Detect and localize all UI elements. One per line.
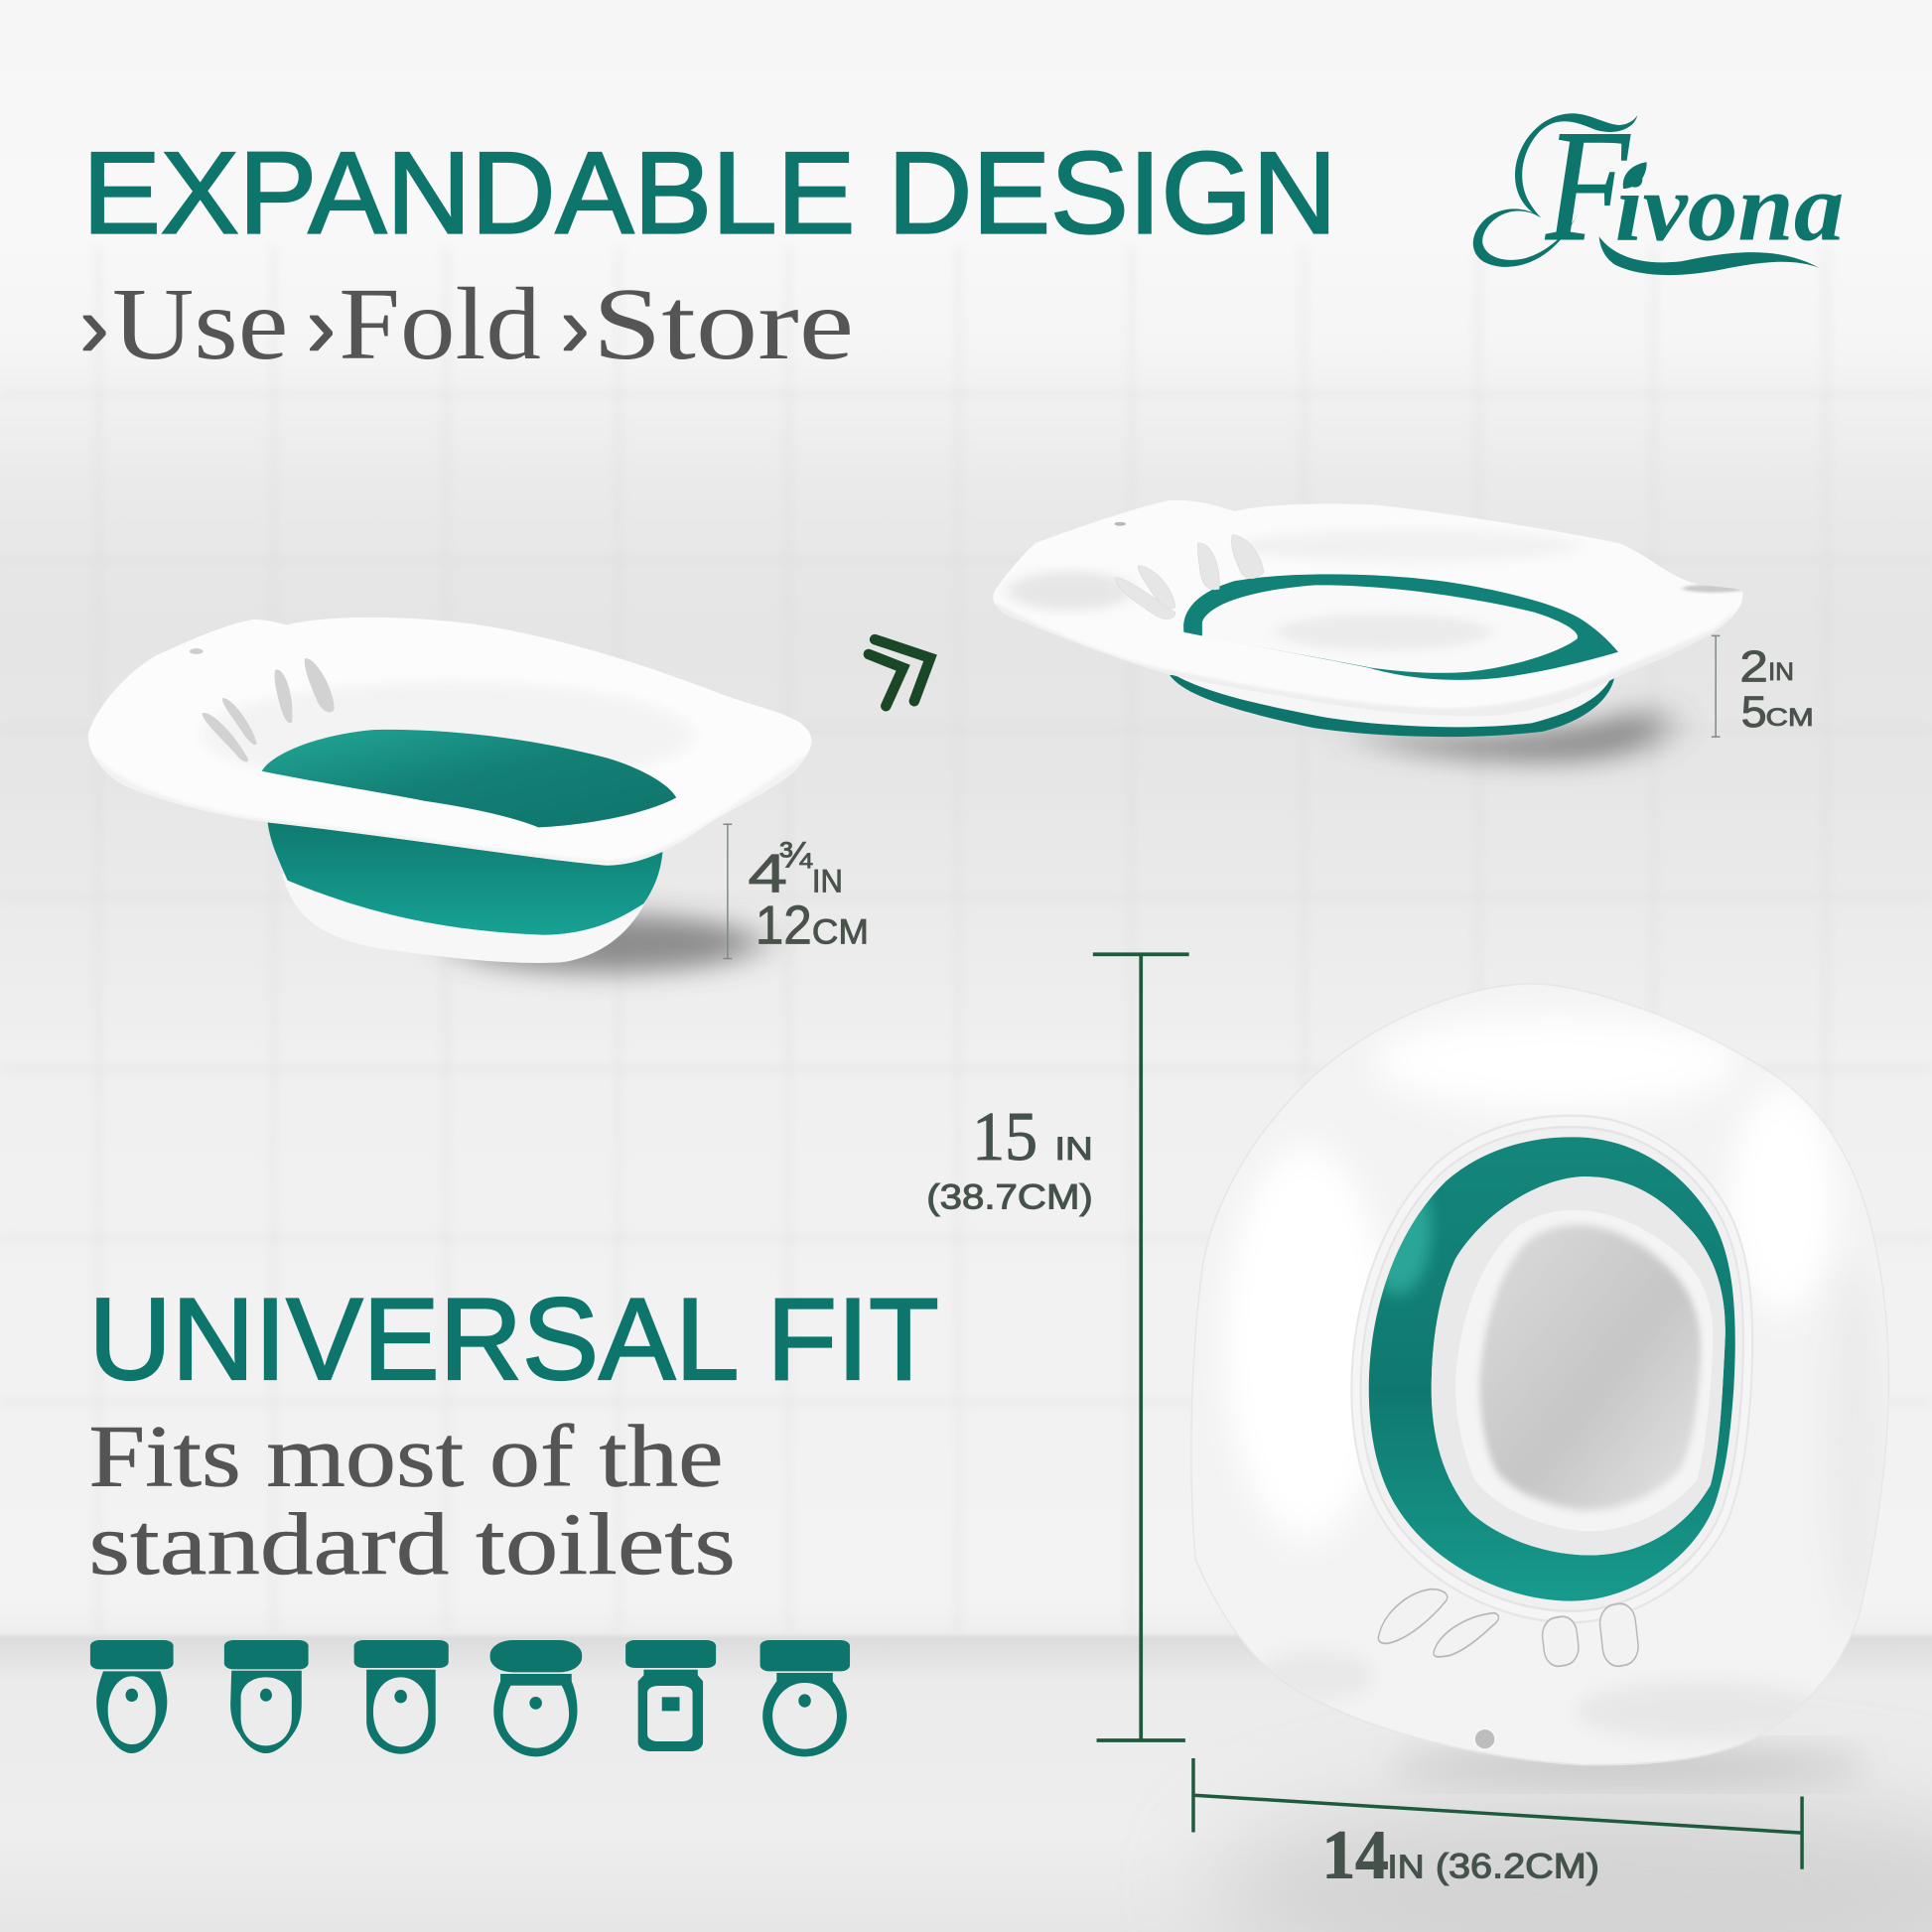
shadow under folded basin [1343, 705, 1665, 761]
height label folded: 5 [1741, 688, 1767, 737]
label: 14 in: IN [1387, 1849, 1425, 1885]
inner basin well [1479, 1225, 1701, 1510]
height label inches: 12 [756, 896, 812, 956]
rim hole [1474, 1728, 1495, 1750]
logo: Fivona: ivona [1615, 155, 1844, 262]
icon: elongated toilet [90, 1640, 174, 1753]
icon: round-tank toilet [490, 1640, 582, 1756]
drainage slots [203, 658, 335, 762]
height label folded [1739, 642, 1814, 737]
teal folded ring [1183, 574, 1618, 680]
icon: round toilet [760, 1640, 850, 1756]
icon: long square-back toilet [354, 1640, 449, 1754]
label: 14 in [1322, 1817, 1599, 1893]
folded basin interior [1202, 585, 1578, 673]
subtitle: use fold store: › [80, 279, 109, 375]
logo: Fivona: F [1545, 97, 1631, 274]
logo: Fivona [1473, 97, 1844, 275]
product: basin top view [1191, 984, 1888, 1778]
subtitle: use fold store: Store [593, 266, 854, 381]
icons: toilet shapes [90, 1640, 850, 1756]
ridges around teal ring [1369, 1137, 1735, 1601]
subtitle: use fold store: Fold [339, 266, 541, 381]
height label inches: CM [812, 914, 869, 952]
basin rim [993, 500, 1742, 716]
inner basin ridge [1455, 1210, 1713, 1531]
dimension: horizontal 14 in [1193, 1758, 1802, 1893]
subtitle: use fold store: › [307, 279, 336, 375]
dimension: vertical 15 in [926, 954, 1189, 1740]
height label inches [748, 834, 869, 956]
basin rim [88, 618, 812, 866]
height label folded: 2 [1739, 642, 1768, 691]
subtitle: use fold store: Use [112, 266, 288, 381]
shadow under top view [1388, 1751, 1869, 1778]
teal basin interior [262, 730, 676, 827]
text: fits most of the standard toilets: Fits most of the [88, 1408, 724, 1506]
height label folded: IN [1768, 659, 1794, 686]
height label inches: IN [812, 864, 843, 899]
icon: double chevron arrow [869, 639, 930, 706]
rim hole [190, 648, 204, 654]
folded white base [1170, 672, 1612, 727]
basin lower body [282, 874, 646, 963]
shadow under expanded basin [453, 913, 760, 973]
drainage slots [1116, 535, 1264, 620]
label: 15 in [926, 1099, 1093, 1216]
dimension: folded height [1712, 635, 1814, 737]
height label inches: 4 [748, 844, 787, 904]
folded teal base [1170, 675, 1614, 737]
height label folded: CM [1765, 705, 1814, 732]
heading: universal fit: UNIVERSAL FIT [88, 1274, 939, 1404]
product: expanded basin [82, 618, 823, 973]
rim hole [1114, 522, 1126, 526]
text: fits most of the standard toilets [88, 1408, 736, 1593]
height label inches: ¾ [778, 834, 813, 876]
label: 15 in: IN [1054, 1131, 1093, 1167]
subtitle: use fold store [80, 266, 854, 381]
product: folded basin [990, 500, 1745, 761]
text: fits most of the standard toilets: standard toilets [88, 1495, 736, 1593]
label: 14 in: (36.2CM) [1436, 1848, 1599, 1885]
title: expandable design: EXPANDABLE DESIGN [82, 128, 1337, 258]
drainage slots [1378, 1589, 1640, 1669]
icon: square-back elongated toilet [224, 1640, 309, 1753]
icon: square toilet [625, 1640, 716, 1751]
subtitle: use fold store: › [561, 279, 590, 375]
label: 15 in: (38.7CM) [926, 1178, 1093, 1216]
label: 15 in: 15 [972, 1099, 1037, 1175]
teal collapsible band [268, 822, 662, 935]
teal collapsible ring [1364, 1137, 1735, 1601]
dimension: expanded height [724, 824, 869, 959]
basin outline [1191, 984, 1888, 1765]
inner basin white step [1432, 1176, 1725, 1555]
label: 14 in: 14 [1322, 1817, 1389, 1893]
